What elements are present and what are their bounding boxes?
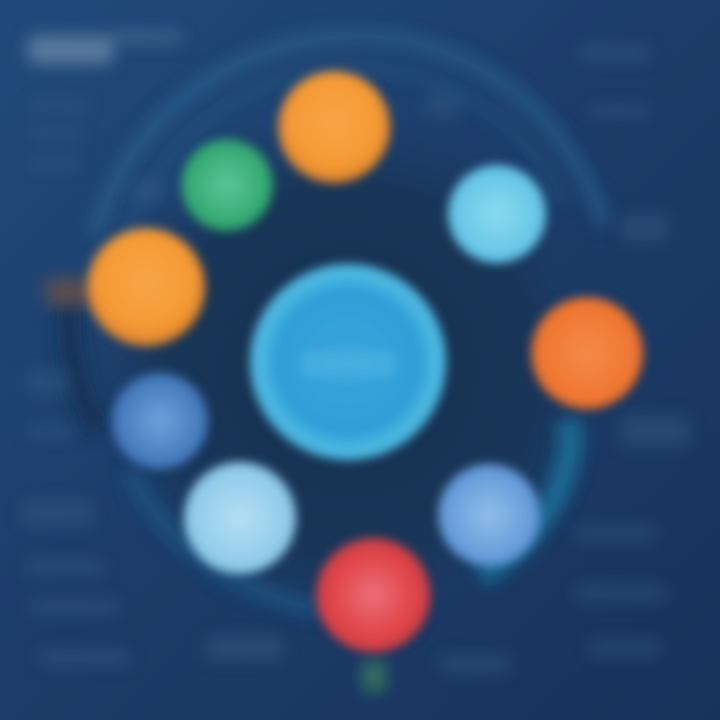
node: orange top bbox=[278, 71, 390, 183]
connector: green stub under red node bbox=[362, 660, 386, 692]
node: red bottom bbox=[316, 538, 430, 652]
hub label bbox=[302, 352, 394, 376]
node: blue left bbox=[112, 373, 208, 469]
connector: orange node left stub bbox=[45, 278, 95, 306]
title placeholder bbox=[28, 30, 182, 64]
node: pale blue bottom left bbox=[184, 462, 296, 574]
node: deep orange right bbox=[531, 297, 643, 409]
node: orange left bbox=[87, 228, 205, 346]
outer arc bbox=[69, 36, 605, 610]
central hub bbox=[250, 264, 446, 460]
dark centre of the ring bbox=[85, 105, 615, 635]
node: green bbox=[181, 139, 273, 231]
node: periwinkle bottom right bbox=[438, 464, 540, 566]
node: cyan bbox=[448, 165, 546, 263]
